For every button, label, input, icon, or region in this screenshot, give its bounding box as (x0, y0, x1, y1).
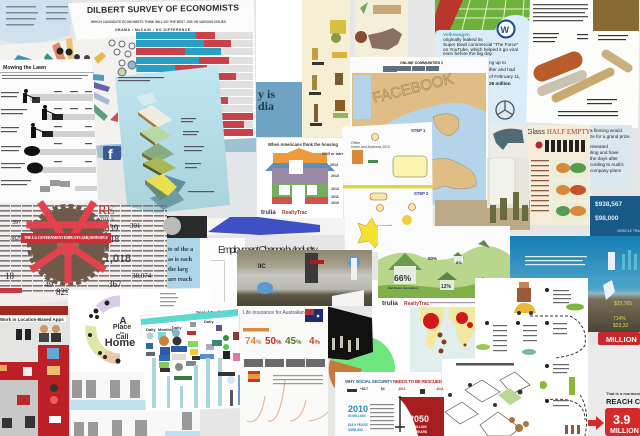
heading: Life insurance for Australians (243, 310, 308, 316)
VW text: originally leaked its (443, 37, 483, 42)
panel: Social Surfing (141, 306, 242, 411)
tube: orange cylinder (542, 60, 574, 73)
stat: 2050 details (409, 425, 427, 434)
panel: soldier and landscape photo (237, 250, 372, 306)
newspaper copy (5, 202, 152, 297)
title: A Place to Call Home: Home (105, 337, 135, 349)
figures (72, 380, 192, 436)
stat: 2010 details: $358,492 (348, 428, 363, 432)
heading: Step 1: STEP 1 (411, 128, 426, 133)
heading: Employment Change by Industry (218, 245, 318, 256)
heading: WHY SOCIAL SECURITY NEEDS TO BE RESCUED (345, 379, 443, 384)
stat: 2010 details: $18.9 YEARS (348, 423, 368, 427)
newspaper copy: 367 (108, 279, 122, 289)
icon: green house (360, 2, 368, 14)
panel: Employment change by industry (200, 238, 318, 313)
heading: Mowing the Lawn: Mowing the Lawn (3, 65, 46, 71)
people row (545, 140, 585, 152)
VW text: Volkswagen (443, 32, 470, 37)
arrow to reach (588, 416, 604, 430)
heading (0, 315, 66, 322)
panel: blue article strip (167, 238, 201, 290)
dark label (218, 372, 235, 376)
small houses (437, 240, 490, 290)
figure: astronaut lower (603, 280, 615, 300)
stat: amount two: $98,000 (595, 215, 619, 222)
stat: 2050 details: 99 MILLION (409, 425, 427, 429)
panel: crawling figures (70, 372, 200, 436)
timeline values: -$4.4 (436, 387, 443, 391)
white figure (351, 258, 357, 280)
newspaper copy: 397 (12, 220, 21, 226)
red stat box: MILLION (610, 428, 639, 435)
tabs (383, 66, 439, 72)
photo: toy soldiers and glass (435, 158, 530, 230)
panel: steel blue headline (256, 82, 302, 137)
people dots (509, 417, 529, 432)
panel: light strip under survey (96, 138, 256, 158)
newspaper copy: 1,018 (104, 251, 131, 265)
VW text: Super Bowl commercial "The Force" (443, 42, 519, 47)
field lines (438, 0, 531, 30)
panel: tube module diagram (526, 0, 640, 128)
grey lower area (0, 380, 38, 436)
teal band (141, 309, 238, 325)
figure: astronaut top (608, 252, 615, 270)
panel: Step 1 and Step 2 guide (342, 122, 433, 253)
newspaper copy: 829 (56, 287, 70, 297)
icon: house (265, 148, 335, 207)
panel: white page in centre (372, 280, 412, 372)
photo: Mars rover scene (593, 0, 639, 31)
panel: wheel of categories (0, 36, 139, 146)
panel: white page beside survey (256, 0, 302, 82)
stat: 50%: 50% (428, 256, 437, 261)
timeline icons (347, 389, 425, 394)
article text (168, 247, 193, 283)
numbered markers (485, 288, 549, 403)
timeline values: -$5.3 (398, 387, 405, 391)
chain and anchor (395, 396, 405, 432)
bar chart: candidate survey bars (136, 32, 253, 136)
stat bars (622, 250, 637, 270)
stat: 2050 details: 20.5 YEARS (409, 430, 427, 434)
stat text: $23,32 (613, 323, 629, 329)
newspaper copy: 3829 (10, 236, 22, 242)
panel: Audi article continuation (590, 125, 632, 190)
VW text: on YouTube, which helped it go viral (443, 47, 518, 52)
panel: top right navy stat (590, 196, 640, 236)
panel: Glass Half Empty (527, 125, 592, 225)
newspaper copy: 391 (130, 222, 141, 230)
stat: 2010 details: 54 MILLION (348, 414, 366, 418)
soldiers (490, 192, 528, 223)
red accent (310, 260, 324, 264)
heading (456, 363, 514, 366)
blue globe (257, 282, 273, 294)
panel: dark silhouette photo (326, 306, 373, 360)
panel: red dot world map (410, 307, 476, 380)
column labels: Monthly (158, 327, 174, 332)
divider band (0, 71, 94, 74)
green button (368, 160, 378, 163)
article text: reseated (590, 144, 608, 149)
orange flag chart (248, 371, 260, 382)
stat: 2010: 2010 (348, 404, 368, 414)
social logos (146, 322, 240, 380)
panel: red million pill (598, 332, 640, 345)
stat: 12%: 12% (441, 284, 452, 290)
intro copy (2, 75, 88, 79)
tube: upper cylinder (606, 54, 628, 68)
map islands (432, 114, 476, 190)
title: A Place to Call Home: Place (113, 324, 131, 331)
tube: gold cylinder (556, 72, 610, 98)
green illustrations (476, 304, 584, 395)
article text: company plans (590, 168, 622, 173)
panel: travel road trip (475, 278, 604, 436)
silhouettes (332, 336, 359, 352)
panel: house percent green hills (378, 226, 510, 307)
year labels: 2013 (331, 174, 339, 178)
red dots (423, 312, 473, 329)
blue usage bar (238, 375, 241, 405)
axis (211, 260, 225, 302)
yellow starburst (358, 218, 392, 248)
map land (352, 73, 486, 205)
column labels (146, 319, 214, 332)
inset map (353, 75, 371, 119)
map water (385, 103, 486, 205)
year labels: 2011 (331, 195, 339, 199)
blue sky blob (348, 256, 360, 268)
article text: te of the a (168, 247, 193, 253)
RealtyTrac logo: RealtyTrac (404, 301, 430, 307)
green square (498, 388, 522, 405)
year labels (322, 152, 344, 205)
panel: desert blue landscape (510, 236, 640, 332)
brown dots (438, 332, 466, 354)
icon: VW logo: W (500, 25, 510, 35)
grey tab row (244, 359, 325, 367)
VW text: ng up to (489, 60, 506, 65)
heading: Step 2: STEP 2 (414, 191, 429, 196)
sun icon (402, 215, 412, 225)
red top arch (0, 306, 68, 315)
headline fragment 2: dia (258, 99, 274, 113)
copy lines (273, 375, 323, 384)
red corner accent (0, 288, 22, 293)
tube: grey cylinder (542, 75, 582, 91)
donut chart (91, 301, 120, 359)
newspaper copy: THE S (100, 218, 114, 223)
heading: Glass Half Empty: Glass HALF EMPTY (527, 128, 591, 136)
column labels: Daily (146, 327, 156, 332)
gear (21, 205, 111, 284)
deep green hills (378, 282, 510, 298)
year labels: 2012 (331, 187, 339, 191)
VW text (443, 32, 520, 86)
stats: 45% (285, 336, 302, 347)
red track (435, 0, 463, 50)
panel: Why Social Security Needs to Be Rescued (335, 372, 444, 436)
icon: Facebook tile (103, 146, 121, 162)
panel: Dilbert survey of economists (68, 0, 256, 145)
newspaper copy: 18 (110, 234, 120, 244)
FACEBOOK label: FACEBOOK (371, 70, 455, 107)
stat: 8%: 8% (456, 260, 462, 265)
article text: are reach (168, 277, 193, 283)
article text: the days after (590, 156, 618, 161)
panel: Mowing the Lawn (0, 59, 98, 203)
year labels: 2010 (331, 201, 339, 205)
icon: red-brown circle (355, 31, 367, 43)
banner text: THE U.S. GOVERNMENT EMPLOYS 2,840,330 PEOPLE (24, 236, 108, 240)
red debt curve (398, 397, 444, 436)
stat: 66%: 66% (394, 273, 412, 283)
VW text: even before the big day. (443, 51, 493, 56)
red flow band (38, 345, 69, 436)
panel: 3.9 million reach (588, 345, 640, 436)
newspaper copy: RE (98, 202, 115, 217)
lower blue stripe (165, 431, 200, 436)
panel: top-left blue article (0, 0, 72, 46)
body copy (370, 404, 394, 429)
panel: small world map (490, 125, 528, 158)
article text (590, 128, 631, 173)
newspaper copy: 18 (5, 271, 14, 281)
article text: iting and have (590, 150, 619, 155)
stacked layers illustration (137, 92, 186, 210)
tube labels (533, 33, 628, 116)
heading: ONLINE COMMUNITIES 2 (400, 61, 443, 65)
icon column (309, 20, 348, 126)
heading text: Work in Location-Based Apps (0, 317, 64, 322)
yellow band (342, 185, 433, 188)
newspaper copy: 38,074 (132, 272, 152, 280)
mowing rows (1, 89, 97, 192)
stats (245, 336, 321, 347)
callout background (435, 15, 531, 125)
VW text: 26 million (489, 81, 511, 86)
panel: blue geometric shape (205, 217, 345, 235)
isometric blocks (445, 372, 530, 436)
trulia logo: trulia (382, 300, 398, 307)
stats: 74% (245, 336, 262, 347)
dark usage bar (230, 390, 233, 406)
world maps (552, 160, 588, 220)
panel: Online Communities map (350, 57, 488, 205)
continents (420, 307, 445, 350)
people icons (2, 416, 35, 428)
panel: cream icon list (302, 0, 350, 137)
dark people dots (448, 383, 522, 407)
heading: Dilbert survey: DILBERT SURVEY OF ECONOMISTS (87, 2, 239, 15)
silhouette figure (305, 253, 318, 283)
timeline values: +$3.7 (360, 387, 368, 391)
legend (160, 293, 178, 306)
red ribbons (30, 205, 105, 280)
article text: the larg (168, 267, 188, 273)
usage bars (152, 358, 222, 408)
orange oval markers (370, 134, 416, 212)
newspaper copy: 49 (45, 280, 53, 289)
VW text: of February 11, (489, 74, 520, 79)
timeline values (360, 387, 443, 391)
yellow callout (393, 156, 427, 177)
legend: Obama McCain no difference: OBAMA ▪ McCAIN ▪ NO DIFFERENCE (115, 28, 191, 32)
poster captions (118, 77, 214, 192)
stat: amount: $938,567 (595, 201, 622, 208)
headline fragment: y is (258, 87, 275, 101)
banner (21, 233, 111, 243)
subtitle: survey question: WHICH CANDIDATE ECONOMISTS THINK WILL DO THE BEST JOB ON VARIOUS ISSUES (91, 20, 226, 24)
title: A Place to Call Home: to (120, 330, 124, 335)
title: A Place to Call Home (105, 316, 135, 349)
donut markers (88, 300, 120, 364)
text columns (493, 290, 571, 406)
stats: 4% (309, 336, 321, 347)
article text: as is each (168, 257, 193, 263)
panel: location-based apps (red) (0, 306, 70, 436)
dashed road (530, 316, 587, 436)
footer: logos (378, 298, 510, 307)
footer copy (430, 302, 506, 303)
heading: reach: REACH C (606, 397, 640, 406)
column labels: Daily (172, 325, 182, 330)
VW text: ifter and had (489, 67, 515, 72)
description (525, 256, 587, 265)
article text: cording to Audi's (590, 162, 624, 167)
caption 66: Cut home renovation (388, 286, 418, 290)
panel: newspaper and gear (0, 200, 167, 308)
stat: 2010 details (348, 414, 368, 432)
panel: Life insurance for Australians (240, 306, 328, 436)
newspaper copy: 4,039 (98, 223, 119, 233)
panel: blue stacked book poster (115, 66, 230, 216)
article text: a fleming would (590, 128, 622, 133)
icon: car with luggage (514, 282, 536, 315)
icon: Mercedes logo (496, 101, 514, 119)
small people (565, 425, 580, 434)
stats: 50% (265, 336, 282, 347)
timeline values: $4 (381, 387, 385, 391)
text column (531, 160, 549, 211)
year labels: 2014 (330, 163, 338, 167)
stat text (613, 301, 632, 329)
article text: ze for a grand prize. (590, 134, 631, 139)
red stat box (605, 408, 640, 436)
stat: 2050: 2050 (409, 414, 429, 424)
heading: Social Surfing (196, 310, 226, 315)
logo: RealtyTrac: RealtyTrac (282, 210, 308, 216)
icon: Australian flag (305, 309, 323, 322)
column labels: Daily (204, 319, 214, 324)
product subtitle: Home and Business 2010 (351, 145, 390, 149)
panel: house survey (Trulia) (257, 138, 344, 218)
spike curves (247, 380, 328, 422)
old world (448, 307, 475, 348)
heading: When Americans think the housing (268, 142, 338, 147)
panel: isometric city (442, 357, 540, 436)
app icons (0, 325, 61, 423)
glass (489, 158, 515, 205)
orange label (243, 328, 269, 332)
blue stripes (70, 400, 146, 410)
blue polygon (208, 217, 320, 235)
icon: Facebook tile: f (108, 146, 113, 162)
title: A Place to Call Home: Call (116, 334, 128, 341)
stat text: $23,765 (614, 301, 632, 307)
title: A Place to Call Home: A (119, 316, 127, 327)
white sign (332, 290, 364, 306)
red stat box: 3.9 (613, 413, 630, 427)
panel: light grey area below survey (225, 152, 257, 212)
small house icons (109, 40, 136, 76)
panel: car photo (163, 216, 207, 240)
icon: red drop (536, 142, 542, 148)
panel: China facts (355, 0, 408, 60)
label MILLION: MILLION (606, 335, 637, 344)
tan bar (373, 5, 401, 14)
heading: IIC (258, 264, 266, 270)
round badge (227, 376, 235, 384)
panel: A Place to Call Home (68, 288, 212, 372)
year labels: 2015 or later (322, 152, 344, 156)
icon: box art (352, 150, 363, 164)
icon: map of China (368, 28, 402, 50)
hills (378, 246, 510, 297)
stat text: 714% (613, 316, 626, 322)
copy block (533, 4, 588, 21)
logos: trulia (261, 210, 276, 216)
wheel segments (14, 38, 118, 122)
big house icon (388, 253, 422, 284)
chart: green circle slices (329, 336, 395, 402)
red horizontal flow (0, 362, 40, 380)
newspaper copy texture (0, 203, 167, 295)
panel: Volkswagen stat (435, 0, 531, 125)
product title: Office (351, 141, 360, 145)
